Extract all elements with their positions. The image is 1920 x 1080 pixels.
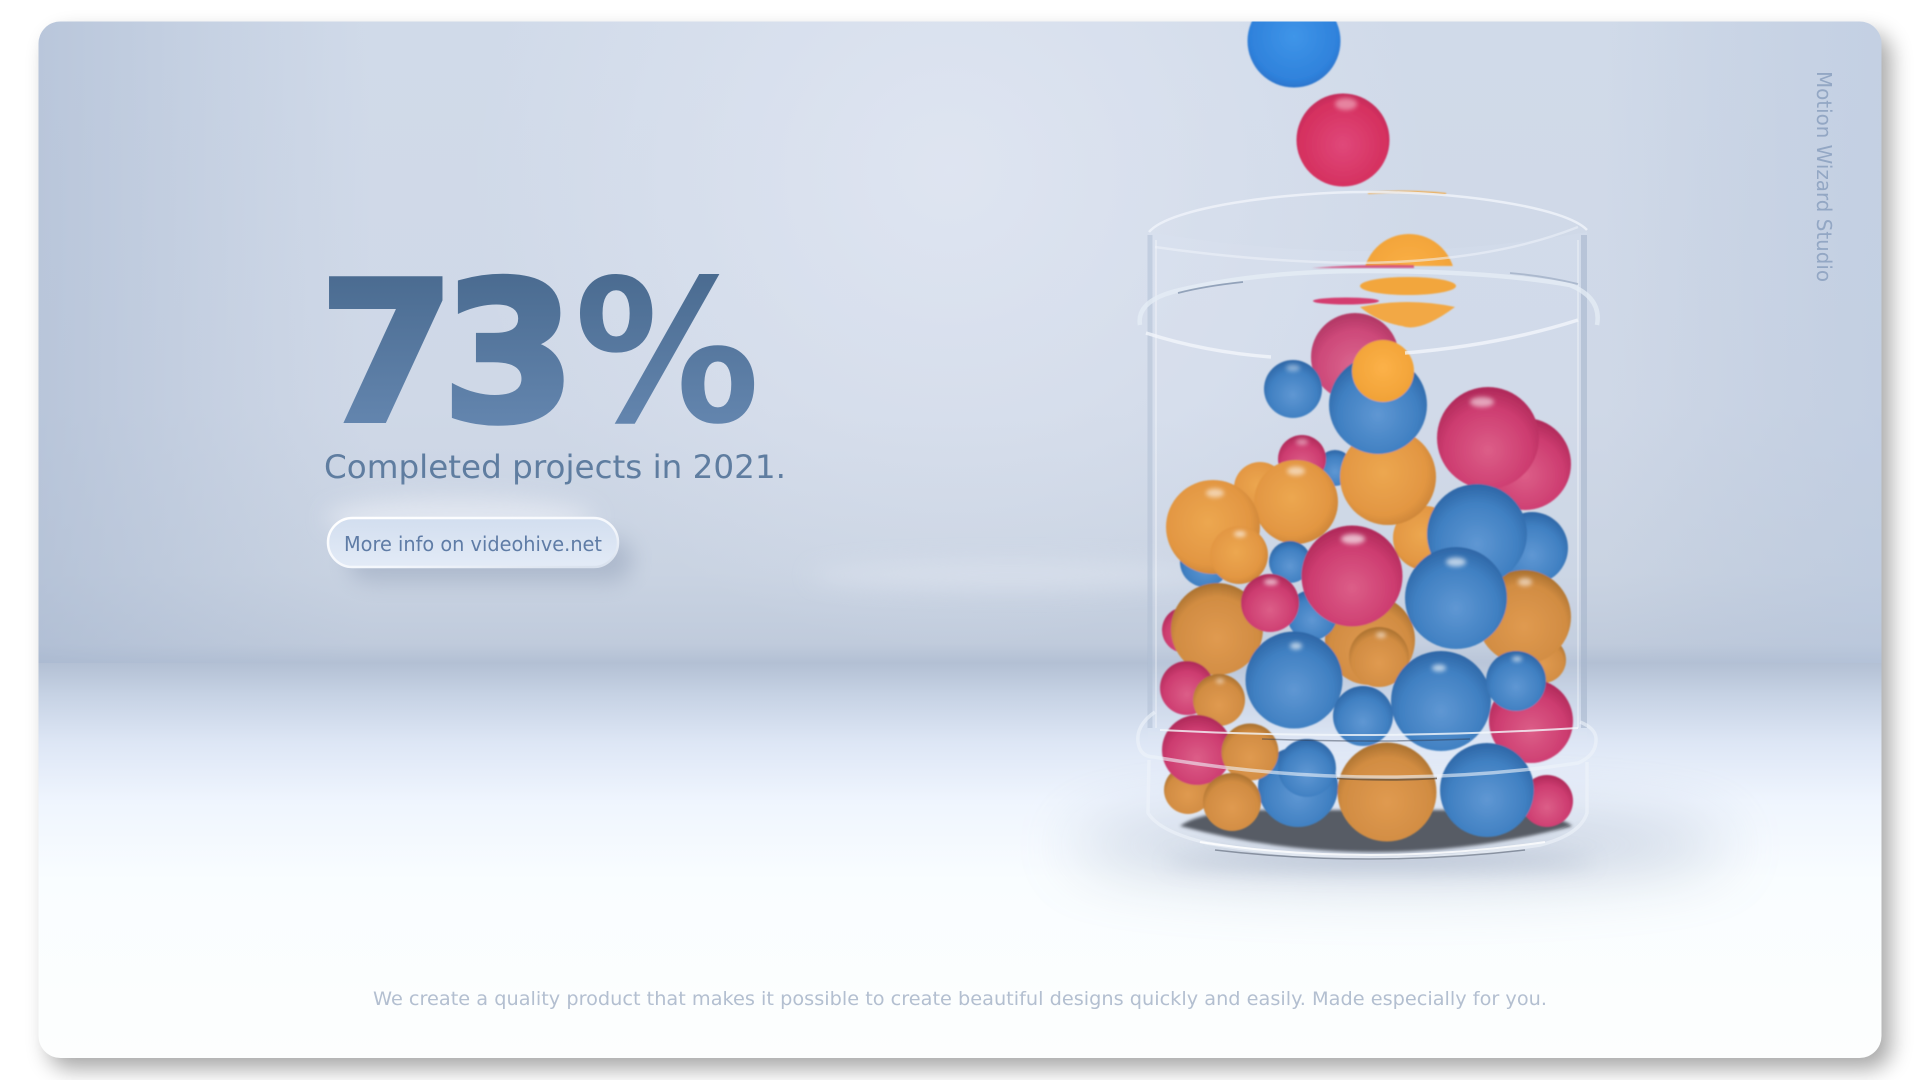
marble: blue back	[1317, 450, 1353, 486]
marble: orange back	[1393, 506, 1457, 570]
marble: blue base large	[1440, 743, 1534, 837]
marble: blue lower centre	[1333, 686, 1393, 746]
marble: red left lower	[1160, 661, 1214, 715]
marble: orange dark left	[1171, 583, 1263, 675]
marble: red small left	[1241, 574, 1299, 632]
marble: blue base	[1258, 747, 1338, 827]
marbles in jar	[1160, 313, 1573, 842]
marble: blue back right	[1496, 512, 1568, 584]
marble: orange base left	[1164, 766, 1212, 814]
marble: orange left small	[1210, 526, 1268, 584]
marble: red centre	[1302, 526, 1402, 626]
marble: orange upper right	[1340, 429, 1436, 525]
jar top lip	[1149, 192, 1587, 263]
marble: blue left centre	[1246, 632, 1342, 728]
jar with marbles	[1138, 192, 1598, 860]
marble: small red back	[1278, 435, 1326, 483]
marble: blue tiny	[1269, 541, 1311, 583]
jar neck ring	[1140, 271, 1598, 357]
marble refractions behind rim	[1312, 192, 1456, 327]
button: more info	[325, 498, 633, 582]
button: more info: More info on videohive.net	[344, 532, 602, 556]
marble: blue base upper	[1278, 739, 1336, 797]
marble: red base right	[1521, 775, 1573, 827]
marble: orange right back small	[1520, 637, 1566, 683]
marble: orange base large	[1338, 742, 1436, 842]
jar bottom	[1148, 760, 1587, 859]
marble: orange base upper	[1222, 724, 1278, 780]
marble: orange back small	[1234, 462, 1286, 514]
subheading: Completed projects in 2021.	[324, 448, 786, 486]
heading: 73%	[319, 237, 760, 468]
marble: orange right	[1477, 570, 1571, 664]
marble: red base left	[1162, 715, 1232, 785]
marble: red big	[1437, 387, 1539, 489]
marble: blue behind red	[1287, 590, 1337, 640]
marble: falling blue	[1246, 22, 1342, 88]
jar base dark	[1180, 810, 1572, 852]
marble: orange base lower	[1203, 773, 1261, 831]
marble: falling red	[1296, 94, 1390, 186]
marble: orange dark small	[1193, 674, 1245, 726]
jar walls	[1150, 235, 1584, 728]
marble: orange small centre	[1349, 627, 1409, 687]
marble: red back left	[1162, 607, 1208, 653]
marble: orange mid back	[1325, 595, 1415, 685]
marble: blue big top	[1329, 356, 1427, 454]
marble: orange upper	[1254, 460, 1338, 544]
marble: blue back left	[1180, 537, 1230, 587]
heading: 73%: %	[574, 237, 760, 468]
marble: blue small right	[1486, 651, 1546, 711]
jar body tint	[1148, 232, 1587, 860]
marble: orange top	[1352, 340, 1414, 402]
marble: blue big lower	[1391, 651, 1491, 751]
marble: blue right	[1427, 484, 1527, 584]
marble: red right lower	[1489, 679, 1573, 763]
marble: red partial	[1311, 313, 1399, 401]
heading: 73%: 3	[442, 241, 576, 466]
jar lower ring	[1138, 712, 1596, 780]
marble: blue small top	[1264, 360, 1322, 418]
falling marbles	[1248, 0, 1390, 186]
marble: orange left big	[1166, 480, 1260, 574]
marble: red back right	[1479, 418, 1571, 510]
heading: 73%: 7	[319, 241, 455, 466]
vertical studio label: Motion Wizard Studio	[1812, 71, 1836, 282]
footer text: We create a quality product that makes it possible to create beautiful designs quickly and easily. Made especially for you.	[373, 988, 1547, 1010]
marble: blue centre right	[1405, 547, 1507, 649]
